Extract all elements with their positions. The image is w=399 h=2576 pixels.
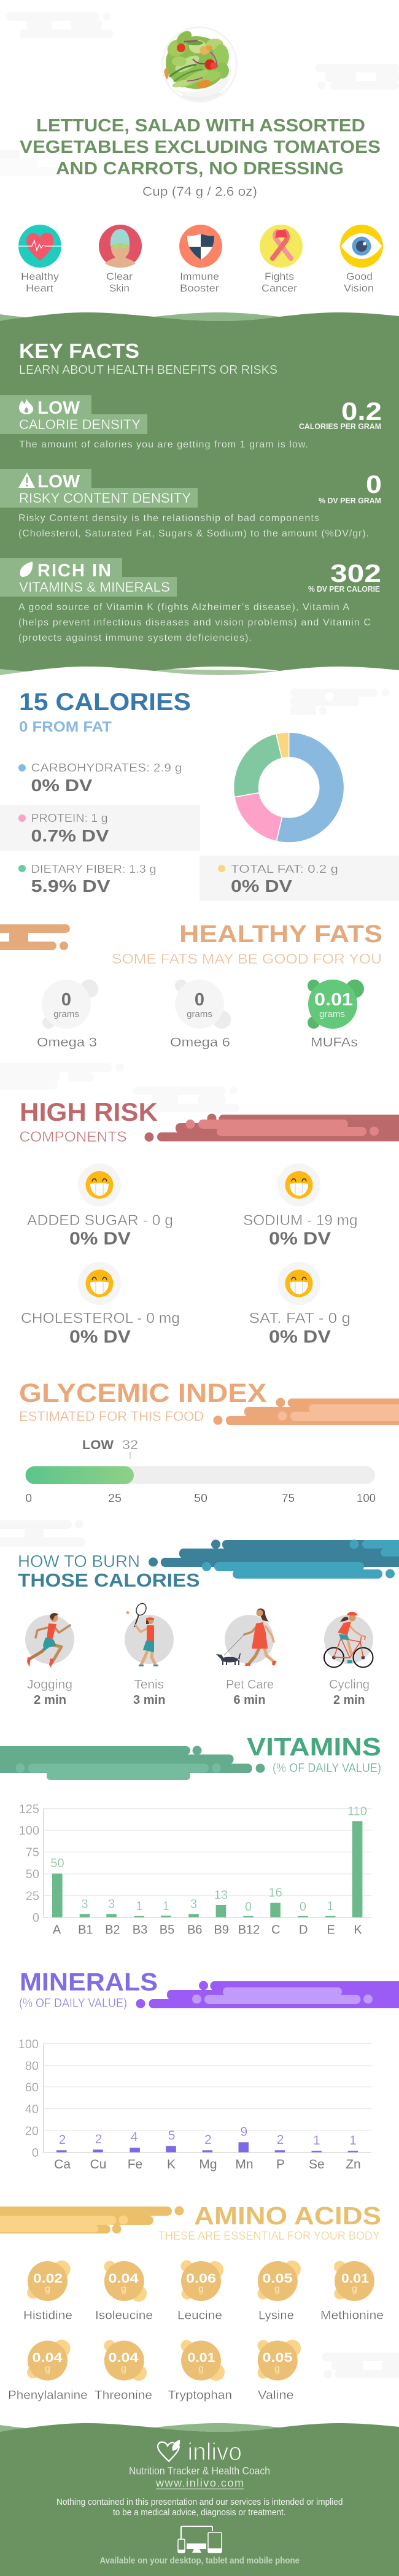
chart: minerals: K <box>167 2157 176 2172</box>
legend: dietary fiber <box>18 863 156 895</box>
fact: rich in vitamins and minerals: % DV PER CALORIE <box>308 584 380 594</box>
heading: minerals: (% OF DAILY VALUE) <box>19 1997 127 2010</box>
chart: vitamins: 0 <box>245 1900 252 1914</box>
heading: key facts: KEY FACTS <box>19 339 139 362</box>
fat: omega 6: Omega 6 <box>170 1035 230 1050</box>
risk: saturated fat: SAT. FAT - 0 g <box>249 1310 351 1327</box>
chart: minerals: 5 <box>168 2129 175 2143</box>
chart: vitamins: B9 <box>214 1924 229 1937</box>
risk: added sugar <box>27 1164 173 1248</box>
amino: tryptophan <box>168 2340 232 2402</box>
labels: activities: 2 min <box>333 1693 365 1707</box>
fat: omega 6: 0 <box>195 990 204 1010</box>
chart: vitamins: 3 <box>108 1898 115 1911</box>
amino: isoleucine: Isoleucine <box>95 2309 153 2323</box>
heading: calories <box>19 689 191 735</box>
chart: minerals: Zn <box>346 2157 361 2172</box>
chart: minerals: 80 <box>25 2060 39 2073</box>
fact: rich in vitamins and minerals <box>0 558 381 643</box>
amino: valine: g <box>274 2364 280 2374</box>
legend: protein: PROTEIN: 1 g <box>31 812 108 824</box>
labels: activities: Jogging <box>27 1678 72 1692</box>
heading: healthy fats <box>0 921 382 967</box>
benefit: healthy heart: Healthy <box>21 271 60 282</box>
glycemic index gauge: 0 <box>26 1492 32 1504</box>
legend: protein <box>18 812 109 845</box>
benefit: immune booster: Immune <box>180 271 219 282</box>
legend: protein: 0.7% DV <box>31 826 109 845</box>
chart: minerals: Fe <box>128 2157 142 2172</box>
image: salad bowl <box>162 27 237 104</box>
fact: calorie density: LOW <box>37 398 80 418</box>
labels: activities <box>27 1678 370 1707</box>
chart: minerals: 1 <box>313 2133 320 2148</box>
fat: omega 6 <box>170 980 231 1050</box>
chart: vitamins: 125 <box>19 1803 39 1816</box>
heading: glycemic index <box>19 1379 399 1425</box>
benefit: clear skin: Clear <box>106 271 133 282</box>
legend: dietary fiber: DIETARY FIBER: 1.3 g <box>31 863 156 875</box>
fact: risky content density: 0 <box>366 470 382 498</box>
activity: pet care <box>216 1608 277 1666</box>
fact: risky content density <box>0 469 382 539</box>
heading: glycemic index: ESTIMATED FOR THIS FOOD <box>19 1409 204 1424</box>
amino: histidine: 0.02 <box>33 2272 63 2286</box>
chart: minerals: Se <box>309 2157 325 2172</box>
glycemic index gauge: 25 <box>108 1492 122 1504</box>
fact: risky content density: LOW <box>37 472 80 492</box>
heading: vitamins <box>0 1733 381 1780</box>
chart: minerals: Mg <box>199 2157 217 2172</box>
heading: high risk <box>20 1097 399 1145</box>
glycemic index gauge: 32 <box>122 1438 138 1452</box>
panel: key facts <box>0 312 399 675</box>
chart: vitamins: B2 <box>105 1924 120 1937</box>
amino: valine: Valine <box>258 2389 293 2402</box>
benefit: good vision: Vision <box>344 282 374 294</box>
benefit: good vision: Good <box>346 271 373 282</box>
chart: minerals: 20 <box>25 2125 39 2138</box>
fact: rich in vitamins and minerals: VITAMINS & MINERALS <box>19 579 170 595</box>
chart: minerals <box>18 2038 371 2172</box>
chart: vitamins: B3 <box>133 1924 147 1937</box>
activity: jogging <box>25 1613 74 1668</box>
chart: vitamins: 25 <box>26 1889 39 1903</box>
chart: vitamins: C <box>271 1924 281 1937</box>
heading: calories: 0 FROM FAT <box>19 719 112 735</box>
chart: minerals: 100 <box>18 2038 39 2051</box>
amino: isoleucine <box>95 2261 153 2323</box>
fat: omega 3 <box>37 980 98 1050</box>
benefit: healthy heart: Heart <box>26 282 53 294</box>
fact: risky content density: RISKY CONTENT DENSITY <box>19 490 191 506</box>
subheading: LEARN ABOUT HEALTH BENEFITS OR RISKS <box>19 363 277 377</box>
amino: threonine: g <box>121 2364 126 2374</box>
legend: total fat: 0% DV <box>231 876 292 895</box>
heading: glycemic index: GLYCEMIC INDEX <box>19 1379 267 1408</box>
availability note: Available on your desktop, tablet and mobile phone <box>99 2556 300 2566</box>
glycemic index gauge: 75 <box>282 1492 295 1504</box>
chart: vitamins: B6 <box>187 1924 202 1937</box>
icon: devices <box>178 2526 222 2553</box>
fact: calorie density: 0.2 <box>341 397 382 425</box>
legend: carbohydrates <box>18 762 182 795</box>
risk: cholesterol <box>21 1262 180 1347</box>
amino: methionine: g <box>352 2284 357 2294</box>
panel: footer <box>0 2423 399 2576</box>
labels: activities: Pet Care <box>226 1678 274 1692</box>
chart: vitamins: E <box>327 1924 335 1937</box>
amino: lysine <box>258 2261 301 2323</box>
title <box>20 116 381 179</box>
amino: methionine: 0.01 <box>341 2272 369 2286</box>
fact: calorie density <box>0 395 382 450</box>
amino: phenylalanine: Phenylalanine <box>8 2389 88 2402</box>
legend: dietary fiber: 5.9% DV <box>31 876 110 895</box>
amino: histidine <box>23 2261 72 2323</box>
activity: cycling <box>324 1612 373 1667</box>
fact: risky content density: % DV PER GRAM <box>319 496 381 505</box>
title: VEGETABLES EXCLUDING TOMATOES <box>20 137 381 157</box>
amino: methionine: Methionine <box>320 2309 384 2323</box>
labels: activities: 2 min <box>34 1693 66 1707</box>
chart: vitamins: 1 <box>136 1900 142 1913</box>
amino: phenylalanine: 0.04 <box>32 2351 63 2365</box>
heading: vitamins: (% OF DAILY VALUE) <box>273 1762 381 1775</box>
decorative clouds: high risk <box>0 1063 239 1112</box>
disclaimer: to be a medical advice, diagnosis or treatment. <box>113 2508 286 2518</box>
risk: added sugar: 0% DV <box>69 1229 131 1248</box>
labels: activities: 6 min <box>233 1693 265 1707</box>
amino: histidine: Histidine <box>23 2309 72 2323</box>
benefit: healthy heart <box>18 225 61 294</box>
tagline: Nutrition Tracker & Health Coach <box>129 2465 270 2477</box>
activity: tennis <box>125 1602 174 1666</box>
fat: mufas <box>308 980 364 1050</box>
logo: inlivo <box>158 2439 242 2466</box>
chart: vitamins: 50 <box>50 1857 64 1870</box>
chart: vitamins: 1 <box>163 1900 169 1913</box>
fact: rich in vitamins and minerals: 302 <box>330 559 381 587</box>
chart: minerals: 2 <box>277 2133 284 2147</box>
chart: vitamins: 0 <box>33 1911 39 1925</box>
heading: how to burn those calories: HOW TO BURN <box>18 1552 140 1571</box>
risk: sodium: SODIUM - 19 mg <box>243 1212 357 1229</box>
chart: vitamins: 75 <box>26 1846 39 1860</box>
amino: phenylalanine: g <box>45 2364 50 2374</box>
fat: mufas: 0.01 <box>314 990 353 1010</box>
amino: leucine: 0.06 <box>186 2272 216 2286</box>
legend backgrounds <box>0 805 399 901</box>
fact: risky content density: Risky Content density is the relationship of bad components <box>18 513 319 524</box>
heading: amino acids: AMINO ACIDS <box>194 2202 381 2230</box>
heading: amino acids <box>0 2202 381 2243</box>
amino: threonine: 0.04 <box>108 2351 139 2365</box>
labels: activities: 3 min <box>133 1693 166 1707</box>
risk: added sugar: ADDED SUGAR - 0 g <box>27 1212 173 1229</box>
chart: minerals: 4 <box>131 2130 138 2145</box>
chart: minerals: 40 <box>25 2103 39 2116</box>
amino: leucine: Leucine <box>177 2309 222 2323</box>
title: LETTUCE, SALAD WITH ASSORTED <box>36 116 365 136</box>
heading: how to burn those calories: THOSE CALORIES <box>18 1569 200 1591</box>
fat: omega 3: Omega 3 <box>37 1035 97 1050</box>
legend: total fat <box>218 863 338 895</box>
amino: tryptophan: g <box>198 2364 204 2374</box>
fat: mufas: grams <box>319 1009 345 1019</box>
amino: methionine <box>320 2261 384 2323</box>
glycemic index gauge: 100 <box>357 1492 376 1504</box>
risk: sodium <box>243 1164 357 1248</box>
amino: lysine: g <box>274 2284 280 2294</box>
fact: risky content density: (Cholesterol, Saturated Fat, Sugars & Sodium) to the amount (%DV/gr). <box>18 528 369 539</box>
heading: high risk: HIGH RISK <box>20 1097 158 1126</box>
chart: minerals: 2 <box>95 2132 102 2146</box>
labels: activities: Tenis <box>134 1678 164 1692</box>
chart: vitamins: B5 <box>160 1924 174 1937</box>
amino: histidine: g <box>45 2284 50 2294</box>
amino: leucine: g <box>198 2284 204 2294</box>
chart: vitamins: 3 <box>190 1898 197 1911</box>
chart: minerals: 2 <box>204 2133 212 2147</box>
decorative cloud: burn <box>0 1520 85 1547</box>
chart: minerals: Mn <box>235 2157 254 2172</box>
legend: total fat: TOTAL FAT: 0.2 g <box>231 863 338 875</box>
benefit: good vision <box>340 225 383 294</box>
risk: cholesterol: CHOLESTEROL - 0 mg <box>21 1310 180 1327</box>
risk: sodium: 0% DV <box>269 1229 331 1248</box>
fact: rich in vitamins and minerals: RICH IN <box>37 561 111 581</box>
decorative cloud: calories <box>290 689 389 715</box>
benefit: immune booster <box>179 225 222 294</box>
chart: vitamins: 16 <box>268 1886 282 1900</box>
heading: vitamins: VITAMINS <box>247 1733 381 1761</box>
fact: rich in vitamins and minerals: (protects against immune system deficiencies). <box>18 633 252 643</box>
chart: minerals: Cu <box>90 2157 106 2172</box>
chart: minerals: 1 <box>349 2133 357 2148</box>
fat: omega 3: grams <box>53 1009 79 1019</box>
glycemic index gauge <box>26 1438 376 1504</box>
chart: minerals: P <box>276 2157 285 2172</box>
website link: www.inlivo.com <box>155 2477 244 2489</box>
amino: tryptophan: Tryptophan <box>168 2389 232 2402</box>
legend: carbohydrates: CARBOHYDRATES: 2.9 g <box>31 762 182 774</box>
logo: inlivo: inlivo <box>188 2439 242 2466</box>
serving size: Cup (74 g / 2.6 oz) <box>142 185 257 199</box>
risk: saturated fat: 0% DV <box>269 1327 331 1347</box>
legend: carbohydrates: 0% DV <box>31 776 93 795</box>
fact: rich in vitamins and minerals: (helps prevent infectious diseases and vision problems) and Vitamin C <box>18 617 371 628</box>
amino: valine: 0.05 <box>263 2351 293 2365</box>
benefit: clear skin <box>99 225 142 294</box>
amino: isoleucine: g <box>121 2284 126 2294</box>
amino: lysine: 0.05 <box>263 2272 293 2286</box>
fat: mufas: MUFAs <box>311 1035 358 1050</box>
chart: vitamins: 1 <box>327 1900 334 1913</box>
fact: rich in vitamins and minerals: A good source of Vitamin K (fights Alzheimer’s disease), Vitamin A <box>18 602 349 613</box>
heading: calories: 15 CALORIES <box>19 689 191 716</box>
heading: high risk: COMPONENTS <box>20 1129 126 1145</box>
heading: minerals: MINERALS <box>20 1968 158 1996</box>
chart: vitamins: B1 <box>78 1924 93 1937</box>
chart: vitamins: 13 <box>214 1889 228 1902</box>
chart: vitamins: 100 <box>19 1824 39 1838</box>
chart: vitamins: K <box>354 1924 362 1937</box>
fat: omega 3: 0 <box>61 990 71 1010</box>
chart: vitamins: B12 <box>238 1924 260 1937</box>
amino: phenylalanine <box>8 2340 88 2402</box>
donut chart <box>234 732 344 843</box>
benefit: immune booster: Booster <box>180 282 219 294</box>
chart: vitamins: 50 <box>26 1868 39 1881</box>
amino: tryptophan: 0.01 <box>188 2351 215 2365</box>
amino: threonine <box>95 2340 152 2402</box>
amino: threonine: Threonine <box>95 2389 152 2402</box>
benefit: fights cancer: Fights <box>265 271 294 282</box>
chart: vitamins: 110 <box>347 1805 367 1819</box>
chart: minerals: 9 <box>240 2125 247 2139</box>
disclaimer: Nothing contained in this presentation and our services is intended or implied <box>56 2497 343 2507</box>
fact: calorie density: The amount of calories you are getting from 1 gram is low. <box>19 439 308 450</box>
chart: vitamins: D <box>299 1924 308 1937</box>
amino: leucine <box>177 2260 223 2323</box>
decorative clouds: header <box>0 12 399 176</box>
chart: minerals: 2 <box>59 2133 66 2147</box>
chart: minerals: 60 <box>25 2081 39 2094</box>
fat: omega 6: grams <box>187 1009 212 1019</box>
decorative cloud: footer <box>322 2353 399 2378</box>
chart: vitamins: 3 <box>81 1898 88 1911</box>
risk: saturated fat <box>249 1262 351 1347</box>
chart: minerals: 0 <box>32 2146 39 2160</box>
chart: vitamins: 0 <box>300 1900 306 1914</box>
heading: how to burn those calories <box>18 1539 399 1591</box>
glycemic index gauge: 50 <box>194 1492 207 1504</box>
risk: cholesterol: 0% DV <box>69 1327 131 1347</box>
amino: lysine: Lysine <box>258 2309 294 2323</box>
fact: calorie density: CALORIE DENSITY <box>19 417 141 432</box>
heading: amino acids: THESE ARE ESSENTIAL FOR YOUR BODY <box>158 2230 380 2243</box>
benefit: fights cancer: Cancer <box>261 282 297 294</box>
title: AND CARROTS, NO DRESSING <box>56 159 344 179</box>
fact: calorie density: CALORIES PER GRAM <box>299 422 381 431</box>
amino: isoleucine: 0.04 <box>108 2272 139 2286</box>
chart: minerals: Ca <box>54 2157 71 2172</box>
benefit: fights cancer <box>260 225 303 294</box>
heading: healthy fats: SOME FATS MAY BE GOOD FOR YOU <box>112 951 382 967</box>
glycemic index gauge: LOW <box>82 1438 114 1452</box>
labels: activities: Cycling <box>329 1678 370 1692</box>
chart: vitamins: A <box>53 1924 61 1937</box>
heading: healthy fats: HEALTHY FATS <box>179 921 382 948</box>
disclaimer <box>56 2497 343 2518</box>
benefit: clear skin: Skin <box>109 282 130 294</box>
heading: minerals <box>19 1968 399 2010</box>
chart: vitamins <box>19 1803 371 1937</box>
amino: valine <box>258 2340 301 2402</box>
